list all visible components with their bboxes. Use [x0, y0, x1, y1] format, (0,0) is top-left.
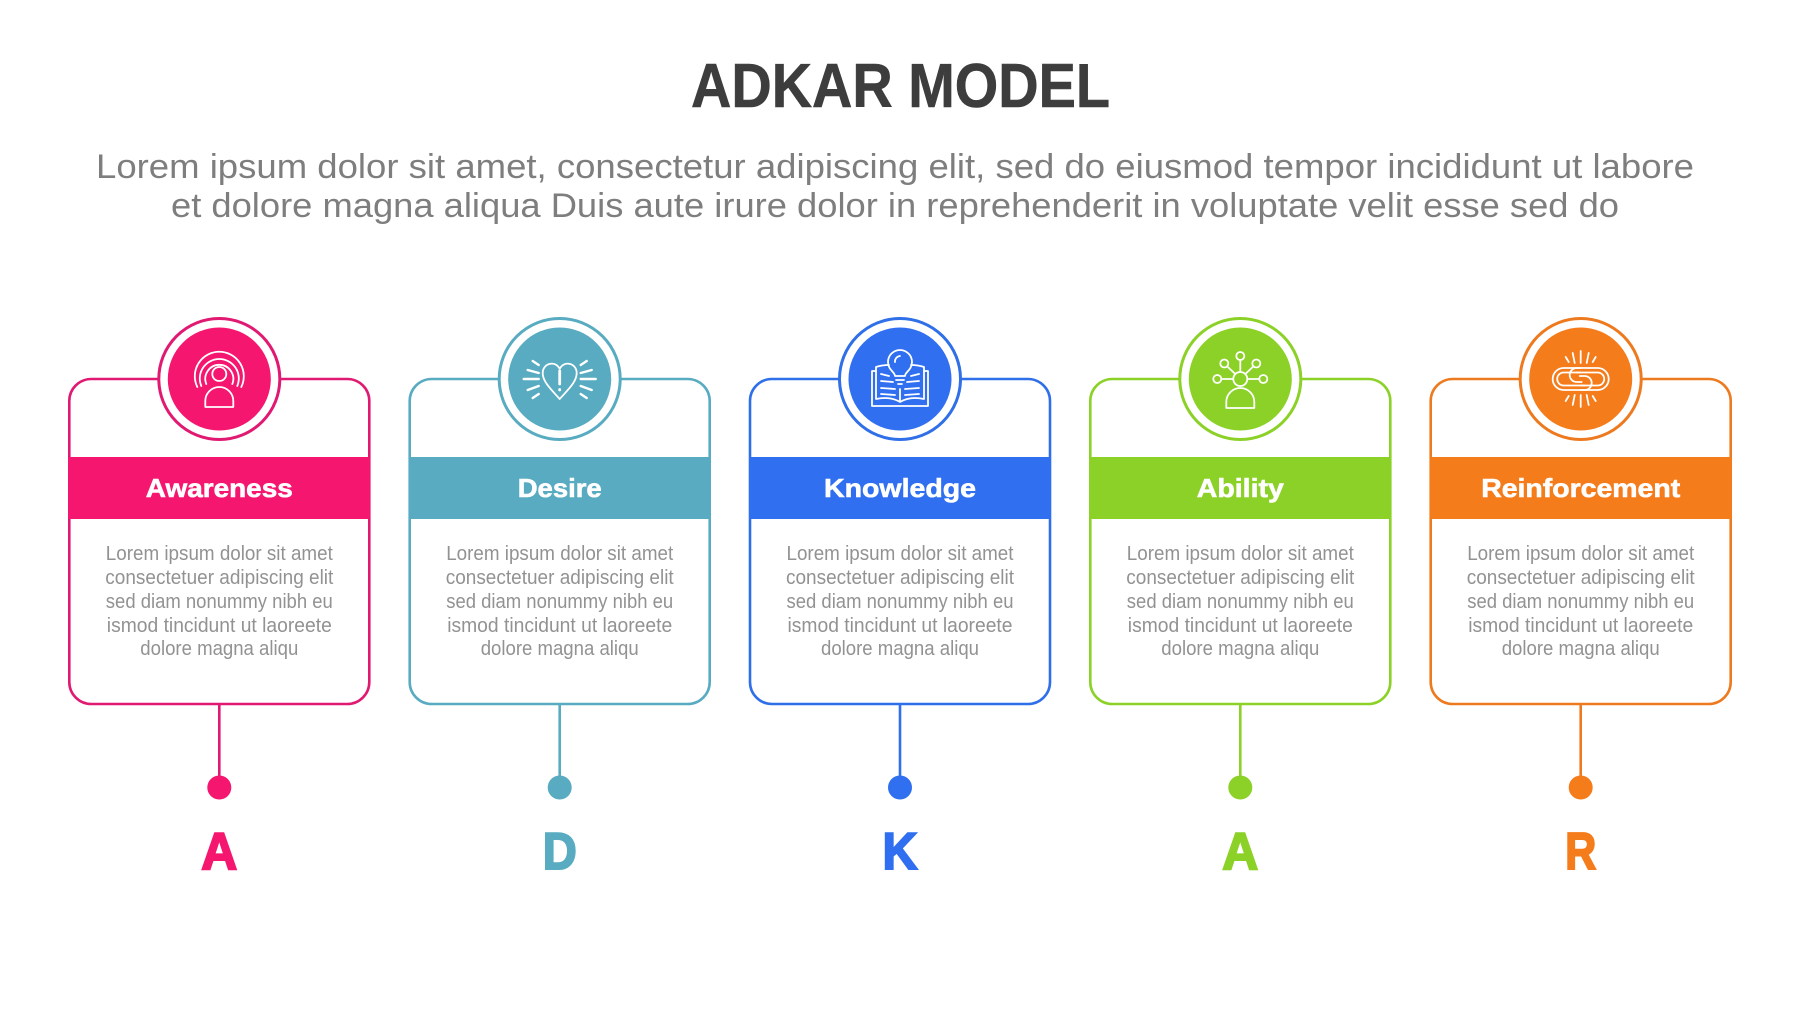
body text: Lorem ipsum dolor sit amet: [446, 542, 673, 565]
body text: sed diam nonummy nibh eu: [1127, 590, 1354, 613]
body text: ismod tincidunt ut laoreete: [788, 614, 1012, 637]
heading band: [68, 457, 370, 519]
icon: chain link with sparks: [1520, 318, 1641, 440]
card outline: [410, 379, 710, 704]
body text: sed diam nonummy nibh eu: [786, 590, 1014, 613]
panel: Ability: [1089, 318, 1391, 881]
letter A: A: [201, 823, 237, 881]
card outline: [69, 379, 369, 704]
panel: Knowledge: [749, 318, 1051, 881]
panel: Desire: [409, 318, 711, 881]
panel: Reinforcement: [1430, 318, 1732, 881]
body text: consectetuer adipiscing elit: [1467, 566, 1695, 589]
body text: dolore magna aliqu: [481, 637, 639, 660]
body text: ismod tincidunt ut laoreete: [107, 614, 332, 637]
icon: open book with light bulb: [840, 318, 960, 440]
connector and dot: [1569, 704, 1593, 800]
body text: [105, 542, 334, 660]
panel: Awareness: [68, 318, 370, 881]
card outline: [1090, 379, 1390, 704]
connector and dot: [548, 704, 572, 800]
body text: dolore magna aliqu: [1502, 637, 1660, 660]
icon: heart with rays: [499, 318, 620, 440]
heading: Reinforcement: [1481, 473, 1681, 503]
connector and dot: [888, 704, 912, 800]
body text: [1126, 542, 1355, 660]
heading: Awareness: [146, 473, 293, 503]
body text: Lorem ipsum dolor sit amet: [1467, 542, 1694, 565]
connector and dot: [1228, 704, 1252, 800]
icon: person broadcasting signal: [159, 318, 280, 440]
body text: ismod tincidunt ut laoreete: [1468, 614, 1693, 637]
heading: Desire: [518, 473, 602, 503]
letter A: A: [1222, 823, 1258, 881]
body text: consectetuer adipiscing elit: [786, 566, 1014, 589]
subtitle text: et dolore magna aliqua Duis aute irure dolor in reprehenderit in voluptate velit esse sed do: [171, 187, 1619, 225]
body text: sed diam nonummy nibh eu: [1467, 590, 1694, 613]
body text: consectetuer adipiscing elit: [1126, 566, 1355, 589]
body text: [786, 542, 1014, 660]
heading: Knowledge: [824, 473, 976, 503]
card outline: [1431, 379, 1731, 704]
letter K: K: [882, 823, 918, 881]
body text: Lorem ipsum dolor sit amet: [106, 542, 333, 565]
icon: person with network nodes: [1180, 318, 1301, 440]
subtitle text: [96, 148, 1694, 225]
body text: ismod tincidunt ut laoreete: [1128, 614, 1353, 637]
subtitle text: Lorem ipsum dolor sit amet, consectetur adipiscing elit, sed do eiusmod tempor incididunt ut labore: [96, 148, 1694, 186]
letter R: R: [1565, 823, 1596, 881]
body text: [1467, 542, 1695, 660]
body text: sed diam nonummy nibh eu: [106, 590, 333, 613]
body text: [446, 542, 674, 660]
heading band: [1089, 457, 1391, 519]
title: ADKAR MODEL: [691, 52, 1110, 121]
body text: consectetuer adipiscing elit: [105, 566, 334, 589]
body text: ismod tincidunt ut laoreete: [447, 614, 672, 637]
connector and dot: [207, 704, 231, 800]
body text: dolore magna aliqu: [821, 637, 979, 660]
heading band: [409, 457, 711, 519]
body text: dolore magna aliqu: [1161, 637, 1319, 660]
body text: Lorem ipsum dolor sit amet: [1127, 542, 1354, 565]
body text: consectetuer adipiscing elit: [446, 566, 674, 589]
body text: dolore magna aliqu: [140, 637, 298, 660]
heading band: [749, 457, 1051, 519]
body text: sed diam nonummy nibh eu: [446, 590, 673, 613]
body text: Lorem ipsum dolor sit amet: [786, 542, 1014, 565]
heading: Ability: [1197, 473, 1284, 503]
letter D: D: [543, 823, 577, 881]
card outline: [750, 379, 1050, 704]
heading band: [1430, 457, 1732, 519]
